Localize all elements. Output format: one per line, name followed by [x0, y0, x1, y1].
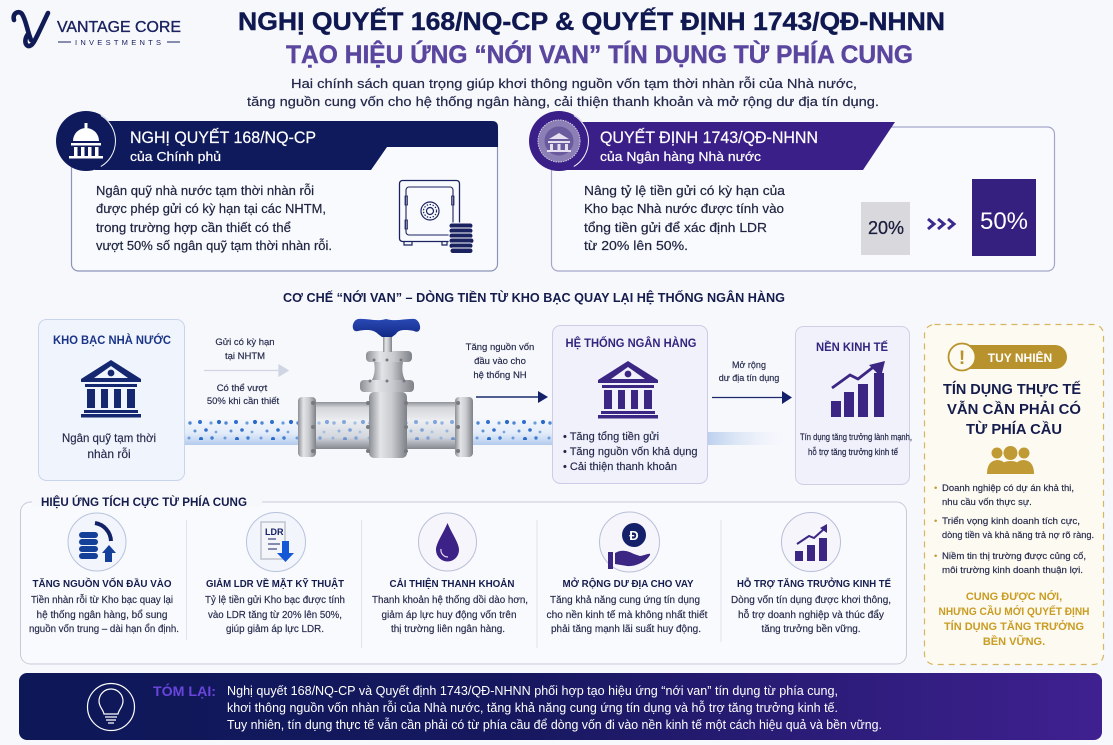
panel: Nền kinh tế: hỗ trợ tăng trưởng kinh tế — [808, 447, 899, 458]
bullet list: Triển vọng kinh doanh tích cực, — [942, 516, 1080, 527]
bullet list: • — [934, 483, 937, 494]
bullet list: • — [934, 516, 937, 527]
effect 2: LDR: Tỷ lệ tiền gửi Kho bạc được tính — [205, 594, 345, 606]
logo: Vantage Core Investments — [14, 12, 181, 47]
money stream — [185, 419, 793, 445]
pill: Tuy nhiên: TUY NHIÊN — [988, 350, 1052, 365]
central body — [369, 392, 407, 458]
bullet list: môi trường kinh doanh thuận lợi. — [942, 565, 1083, 576]
summary text — [227, 684, 882, 732]
label: input capital arrow: đầu vào cho — [474, 356, 526, 367]
icon: bank building — [598, 361, 658, 418]
closing statement: TÍN DỤNG TĂNG TRƯỞNG — [944, 620, 1084, 633]
label: deposit arrow: 50% khi cần thiết — [207, 396, 280, 407]
arrow: dark — [476, 396, 541, 398]
panel: Tuy nhiên — [924, 324, 1104, 664]
label: deposit arrow: Gửi có kỳ hạn — [215, 337, 275, 348]
arrow: dark — [712, 396, 785, 398]
closing statement: NHƯNG CẦU MỚI QUYẾT ĐỊNH — [938, 605, 1090, 618]
pipe — [311, 402, 461, 449]
panel: Nghị quyết 168 — [56, 111, 498, 271]
panel: Nền kinh tế: NỀN KINH TẾ — [816, 339, 888, 354]
summary text: khơi thông nguồn vốn nhàn rỗi của Nhà nước, tăng khả năng cung ứng tín dụng và hỗ trợ tăng trưởng kinh tế. — [227, 700, 838, 715]
20% box — [861, 202, 910, 255]
icon: treasury building — [81, 360, 141, 418]
panel: Quyết định 1743 — [529, 111, 1054, 271]
label: input capital arrow: Tăng nguồn vốn — [466, 342, 534, 353]
panel: Hệ thống ngân hàng: HỆ THỐNG NGÂN HÀNG — [566, 335, 696, 350]
effect 5: economic growth: HỖ TRỢ TĂNG TRƯỞNG KINH TẾ — [737, 577, 891, 590]
effect 2: LDR — [205, 512, 345, 635]
valve illustration — [298, 319, 473, 458]
closing statement: BỀN VỮNG. — [983, 635, 1045, 648]
bullet list — [934, 483, 1094, 576]
arrow: light — [204, 365, 288, 376]
icon: growth chart — [782, 512, 840, 572]
panel: Nền kinh tế — [796, 326, 912, 484]
panel: Kho bạc Nhà nước — [38, 320, 184, 480]
label: Tóm lại: TÓM LẠI: — [153, 682, 216, 699]
panel: Kho bạc Nhà nước: Ngân quỹ tạm thời — [62, 431, 156, 445]
effect 1: input capital: nguồn vốn trung – dài hạn ổn định. — [29, 623, 179, 635]
body text: Ngân quỹ nhà nước tạm thời nhàn rỗi — [96, 183, 314, 198]
bullet list: dòng tiền và khả năng trả nợ rõ ràng. — [942, 530, 1094, 541]
closing statement — [938, 590, 1090, 648]
icon: light bulb — [88, 684, 134, 730]
icon: database with arrow — [68, 513, 126, 571]
bullet list: nhu cầu vốn thực sự. — [942, 497, 1032, 508]
bullet list: Doanh nghiệp có dự án khả thi, — [942, 483, 1074, 494]
label: credit room arrow: Mở rộng — [732, 360, 766, 370]
label: input capital arrow: hệ thống NH — [473, 370, 527, 381]
effect 4: lending room: Tăng khả năng cung ứng tín dụng — [550, 595, 700, 606]
title: TẠO HIỆU ỨNG “NỚI VAN” TÍN DỤNG TỪ PHÍA CUNG — [286, 39, 913, 69]
summary banner — [19, 673, 1102, 740]
panel: Nghị quyết 168: của Chính phủ — [130, 150, 221, 164]
effect 3: liquidity: CẢI THIỆN THANH KHOẢN — [390, 577, 514, 590]
effect 5: economic growth: hỗ trợ doanh nghiệp và thúc đẩy — [738, 608, 884, 621]
effect 5: economic growth: tăng trưởng bền vững. — [762, 623, 860, 635]
heading: HIỆU ỨNG TÍCH CỰC TỪ PHÍA CUNG — [41, 494, 247, 509]
icon: logo mark — [14, 12, 48, 46]
effect 3: liquidity: giảm áp lực huy động vốn trên — [382, 609, 516, 621]
icon: hand with coin — [600, 512, 660, 572]
pill: Tuy nhiên — [948, 344, 1067, 370]
panel: Quyết định 1743: của Ngân hàng Nhà nước — [600, 150, 761, 164]
effect 3: liquidity: thị trường liên ngân hàng. — [391, 624, 505, 635]
brand name: VANTAGE CORE — [57, 19, 181, 36]
label: credit room arrow — [712, 360, 792, 404]
icon: safe with coins — [400, 180, 474, 254]
effect 2: LDR: giúp giảm áp lực LDR. — [226, 624, 324, 635]
effect 1: input capital: hệ thống ngân hàng, bổ sung — [36, 609, 168, 621]
icon: chevrons — [928, 219, 954, 229]
body text: vượt 50% số ngân quỹ tạm thời nhàn rỗi. — [96, 238, 332, 253]
20% box: 20% — [868, 218, 904, 238]
effect 5: economic growth — [731, 512, 891, 635]
effect 3: liquidity — [372, 513, 528, 635]
closing statement: CUNG ĐƯỢC NỚI, — [966, 590, 1062, 603]
effect 1: input capital — [29, 513, 179, 635]
icon: State Bank seal — [529, 111, 589, 171]
stem — [383, 336, 392, 352]
title — [238, 7, 945, 69]
label: deposit arrow — [204, 337, 288, 407]
body text: được phép gửi có kỳ hạn tại các NHTM, — [96, 202, 326, 216]
effect 4: lending room: cho nền kinh tế mà không nhất thiết — [546, 609, 708, 621]
header text: NGHỊ QUYẾT 168/NQ-CP — [130, 128, 316, 147]
label: deposit arrow: Có thể vượt — [217, 383, 268, 394]
icon: hand with coin: Đ — [629, 528, 639, 543]
effect 1: input capital: Tiền nhàn rỗi từ Kho bạc quay lại — [31, 593, 173, 606]
effect 4: lending room — [546, 512, 708, 635]
body text: Kho bạc Nhà nước được tính vào — [584, 202, 784, 216]
50% box — [972, 179, 1036, 256]
section heading: mechanism: CƠ CHẾ “NỚI VAN” – DÒNG TIỀN TỪ KHO BẠC QUAY LẠI HỆ THỐNG NGÂN HÀNG — [283, 290, 785, 305]
bullet list: • Tăng nguồn vốn khả dụng — [563, 446, 698, 458]
subtitle: tăng nguồn cung vốn cho hệ thống ngân hàng, cải thiện thanh khoản và mở rộng dư địa tín dụng. — [247, 94, 879, 109]
pill: Tuy nhiên: ! — [959, 348, 965, 369]
effect 3: liquidity: Thanh khoản hệ thống dồi dào hơn, — [372, 594, 528, 606]
brand subline: INVESTMENTS — [75, 38, 161, 47]
header banner — [565, 122, 895, 170]
subtitle: Hai chính sách quan trọng giúp khơi thông nguồn vốn tạm thời nhàn rỗi của Nhà nước, — [291, 76, 857, 91]
bullet list: • — [934, 551, 937, 562]
heading: TỪ PHÍA CẦU — [966, 420, 1062, 438]
panel: Kho bạc Nhà nước: KHO BẠC NHÀ NƯỚC — [53, 332, 171, 347]
effect 1: input capital: TĂNG NGUỒN VỐN ĐẦU VÀO — [32, 576, 172, 590]
subtitle — [247, 76, 879, 109]
end flanges — [298, 397, 316, 457]
panel: Nền kinh tế: Tín dụng tăng trưởng lành mạnh, — [800, 432, 912, 443]
body text: trong trường hợp cần thiết có thể — [96, 221, 291, 235]
header banner — [95, 121, 498, 170]
bullet list: • Cải thiện thanh khoản — [563, 461, 677, 473]
title: NGHỊ QUYẾT 168/NQ-CP & QUYẾT ĐỊNH 1743/QĐ-NHNN — [238, 7, 945, 36]
label: input capital arrow — [466, 342, 548, 403]
50% box: 50% — [980, 208, 1028, 235]
effect 2: LDR: vào LDR tăng từ 20% lên 50%, — [208, 610, 342, 621]
icon: people — [987, 446, 1034, 474]
header text: QUYẾT ĐỊNH 1743/QĐ-NHNN — [600, 128, 818, 147]
panel: positive supply-side effects — [20, 494, 906, 664]
effect 4: lending room: phải tăng mạnh lãi suất huy động. — [551, 623, 701, 635]
effect 4: lending room: MỞ RỘNG DƯ ĐỊA CHO VAY — [562, 577, 694, 590]
bullet list: • Tăng tổng tiền gửi — [563, 431, 659, 443]
bullet list: Niềm tin thị trường được củng cố, — [942, 551, 1086, 562]
summary text: Tuy nhiên, tín dụng thực tế vẫn cần phải có từ phía cầu để dòng vốn đi vào nền kinh tế một cách hiệu quả và bền vững. — [227, 717, 882, 732]
bolts — [311, 358, 460, 453]
summary text: Nghị quyết 168/NQ-CP và Quyết định 1743/QĐ-NHNN phối hợp tạo hiệu ứng “nới van” tín dụng từ phía cung, — [227, 684, 838, 698]
body text — [96, 183, 332, 253]
icon: capitol badge — [56, 111, 116, 171]
panel: Kho bạc Nhà nước: nhàn rỗi — [87, 446, 131, 461]
body text: từ 20% lên 50%. — [584, 239, 688, 253]
icon: growth chart — [831, 361, 885, 417]
handwheel — [353, 319, 420, 337]
effect 5: economic growth: Dòng vốn tín dụng được khơi thông, — [731, 594, 891, 606]
icon: water drop — [418, 513, 476, 571]
icon: LDR document: LDR — [265, 527, 284, 537]
effect 2: LDR: GIẢM LDR VỀ MẶT KỸ THUẬT — [206, 577, 345, 590]
body text: tổng tiền gửi để xác định LDR — [584, 221, 767, 235]
heading — [943, 381, 1081, 438]
body text — [584, 184, 785, 253]
bonnet — [372, 362, 405, 380]
label: deposit arrow: tại NHTM — [225, 351, 265, 362]
heading: TÍN DỤNG THỰC TẾ — [943, 381, 1081, 398]
heading: VẪN CẦN PHẢI CÓ — [947, 400, 1081, 418]
bullet list — [563, 431, 698, 473]
panel: Hệ thống ngân hàng — [552, 326, 708, 484]
label: credit room arrow: dư địa tín dụng — [719, 373, 779, 383]
body text: Nâng tỷ lệ tiền gửi có kỳ hạn của — [584, 184, 785, 198]
